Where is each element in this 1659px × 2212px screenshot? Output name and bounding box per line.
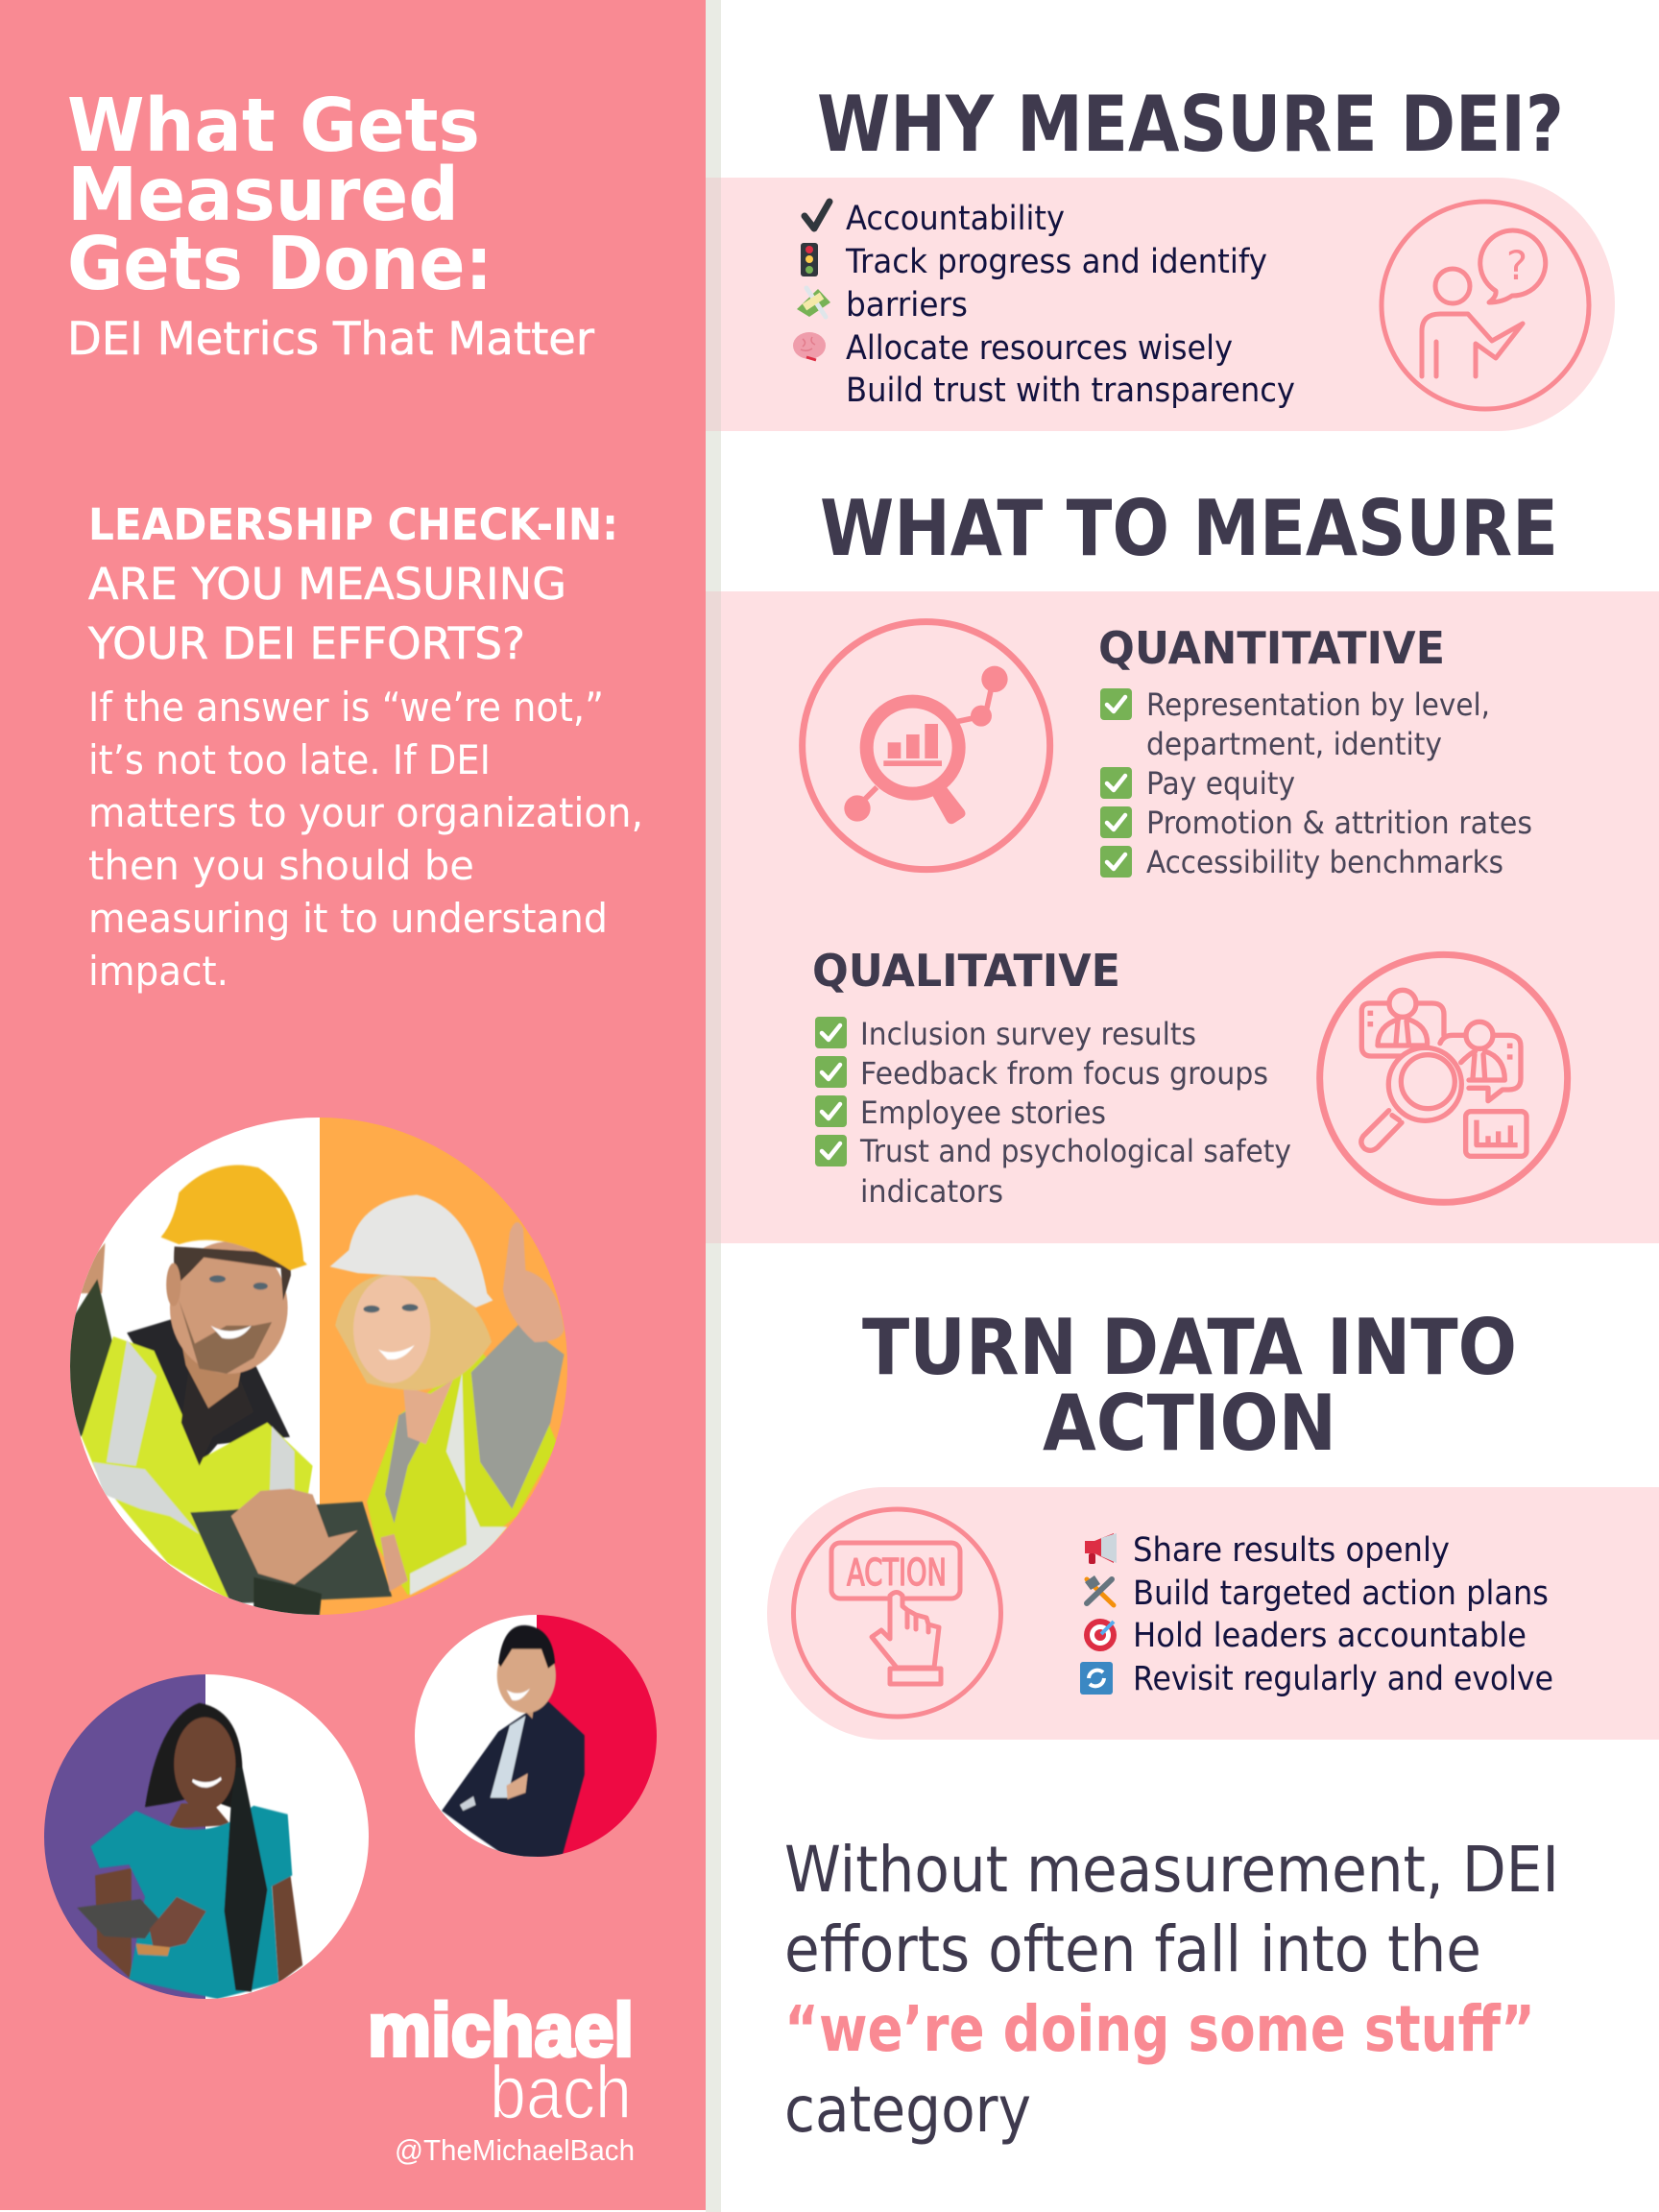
qualitative list — [815, 1016, 1291, 1210]
action list — [1133, 1531, 1553, 1698]
heading: turn data into action — [862, 1303, 1517, 1468]
logo — [368, 1987, 635, 2167]
logo: michael — [368, 1987, 634, 2072]
icon: target — [1084, 1619, 1117, 1651]
leadership check-in heading: YOUR DEI EFFORTS? — [87, 618, 525, 669]
title: What Gets — [67, 84, 480, 169]
why measure list: Track progress and identify — [845, 243, 1267, 281]
icon: money — [797, 288, 830, 317]
icon: megaphone — [1085, 1533, 1117, 1564]
qualitative list: indicators — [860, 1173, 1003, 1210]
photo: woman with tablet — [43, 1674, 369, 1999]
icon: action button with hand — [793, 1509, 1000, 1717]
qualitative list: Inclusion survey results — [860, 1016, 1196, 1052]
panel: turn data into action — [767, 1487, 1659, 1740]
left panel — [0, 0, 706, 2210]
why measure list: Allocate resources wisely — [846, 329, 1233, 368]
quantitative list: Pay equity — [1146, 765, 1295, 802]
closing statement — [784, 1833, 1559, 2147]
quantitative list — [1100, 686, 1532, 880]
leadership check-in paragraph: measuring it to understand — [88, 895, 608, 942]
closing statement: Without measurement, DEI — [784, 1833, 1559, 1907]
why measure list: Build trust with transparency — [846, 372, 1295, 410]
heading: why measure DEI: WHY MEASURE DEI? — [817, 80, 1564, 169]
title: Gets Done: — [67, 222, 493, 307]
heading: turn data into action: ACTION — [1043, 1379, 1336, 1468]
closing statement: category — [784, 2073, 1031, 2147]
quantitative list: department, identity — [1146, 726, 1442, 762]
action list: Revisit regularly and evolve — [1133, 1660, 1553, 1698]
logo: @TheMichaelBach — [395, 2133, 635, 2167]
icon: magnifier with chart — [803, 622, 1050, 870]
divider stripe — [706, 0, 721, 2212]
leadership check-in paragraph: it’s not too late. If DEI — [88, 736, 491, 783]
qualitative list: Trust and psychological safety — [859, 1133, 1291, 1169]
quantitative heading: QUANTITATIVE — [1098, 622, 1445, 674]
quantitative list: Accessibility benchmarks — [1146, 844, 1503, 880]
leadership check-in heading: LEADERSHIP CHECK-IN: — [88, 499, 618, 550]
icon: person with question bubble — [1382, 202, 1589, 409]
closing statement: efforts often fall into the — [784, 1912, 1481, 1986]
leadership check-in heading — [87, 499, 618, 669]
photo: two construction workers — [68, 1118, 567, 1617]
subtitle: DEI Metrics That Matter — [67, 313, 595, 366]
why measure list — [845, 200, 1295, 410]
heading: turn data into action: TURN DATA INTO — [862, 1303, 1517, 1392]
title — [67, 84, 493, 307]
quantitative list: Promotion & attrition rates — [1146, 805, 1532, 841]
leadership check-in heading: ARE YOU MEASURING — [88, 559, 566, 610]
icon: hammer and wrench — [1085, 1575, 1114, 1605]
heading: what to measure: WHAT TO MEASURE — [820, 484, 1558, 573]
panel: what to measure — [706, 591, 1659, 1243]
leadership check-in paragraph: matters to your organization, — [88, 789, 643, 836]
icon: check mark — [805, 202, 830, 228]
action list: Build targeted action plans — [1133, 1575, 1549, 1613]
qualitative list: Feedback from focus groups — [860, 1055, 1268, 1092]
panel: why measure — [706, 178, 1615, 431]
leadership check-in paragraph: impact. — [88, 948, 228, 995]
logo: bach — [490, 2050, 632, 2134]
icon: action button with hand: ACTION — [847, 1551, 947, 1594]
photo: man in suit — [415, 1615, 657, 1858]
leadership check-in paragraph — [88, 684, 643, 995]
quantitative list: Representation by level, — [1146, 686, 1490, 723]
icon: people under magnifier — [1320, 954, 1568, 1202]
why measure list: Accountability — [846, 200, 1065, 238]
icon: refresh — [1080, 1662, 1113, 1695]
icon: traffic light — [801, 243, 818, 276]
title: Measured — [67, 153, 459, 238]
icon: person with question bubble: ? — [1506, 242, 1527, 289]
leadership check-in paragraph: then you should be — [88, 842, 474, 889]
icon: brain — [793, 332, 826, 360]
leadership check-in paragraph: If the answer is “we’re not,” — [88, 684, 604, 731]
why measure list: barriers — [846, 286, 968, 325]
qualitative heading: QUALITATIVE — [812, 945, 1120, 997]
action list: Hold leaders accountable — [1133, 1617, 1527, 1655]
action list: Share results openly — [1133, 1531, 1450, 1570]
qualitative list: Employee stories — [860, 1094, 1106, 1131]
